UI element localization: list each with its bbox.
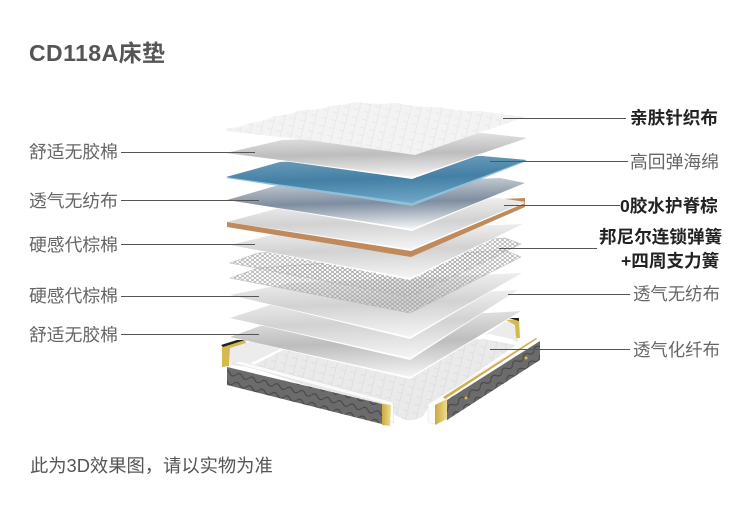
label: right column: 高回弹海绵 — [630, 152, 719, 172]
label: right column: 0胶水护脊棕 — [620, 196, 718, 216]
label: right column — [599, 108, 722, 360]
layer: 舒适无胶棉 upper — [226, 133, 527, 179]
label: left column — [29, 142, 118, 345]
layer: coconut palm board — [227, 198, 525, 257]
leader lines — [121, 118, 630, 350]
layer: 舒适无胶棉 lower — [230, 311, 521, 379]
label: right column: +四周支力簧 — [621, 251, 719, 271]
layer: blue foam — [226, 156, 527, 206]
label: right column: 透气化纤布 — [633, 340, 720, 360]
layer: quilted knit top — [226, 102, 525, 155]
label: left column: 透气无纺布 — [29, 191, 118, 211]
back-left corner — [221, 339, 300, 369]
label: right column: 亲肤针织布 — [630, 108, 718, 128]
layer: base frame — [221, 318, 540, 426]
front-left side band — [227, 361, 394, 426]
label: right column: 透气无纺布 — [633, 284, 720, 304]
title: CD118A床垫 — [29, 40, 165, 66]
footnote: 此为3D效果图，请以实物为准 — [30, 455, 273, 476]
quilted panel — [250, 339, 516, 420]
mattress exploded diagram — [221, 102, 540, 426]
back-right corner — [483, 318, 520, 342]
layer: spring mesh upper — [230, 238, 521, 297]
label: right column: 邦尼尔连锁弹簧 — [599, 227, 722, 247]
label: left column: 舒适无胶棉 — [29, 142, 118, 162]
label: left column: 硬感代棕棉 — [29, 286, 118, 306]
layer: 透气无纺布 upper — [227, 178, 525, 231]
layer: 透气无纺布 lower — [230, 290, 518, 360]
label: left column: 硬感代棕棉 — [29, 235, 118, 255]
label: left column: 舒适无胶棉 — [29, 325, 118, 345]
layer: 硬感代棕棉 upper — [230, 224, 523, 280]
layer: spring mesh lower — [230, 250, 521, 313]
front-right side band — [428, 338, 540, 425]
layer: 硬感代棕棉 lower — [230, 273, 522, 339]
